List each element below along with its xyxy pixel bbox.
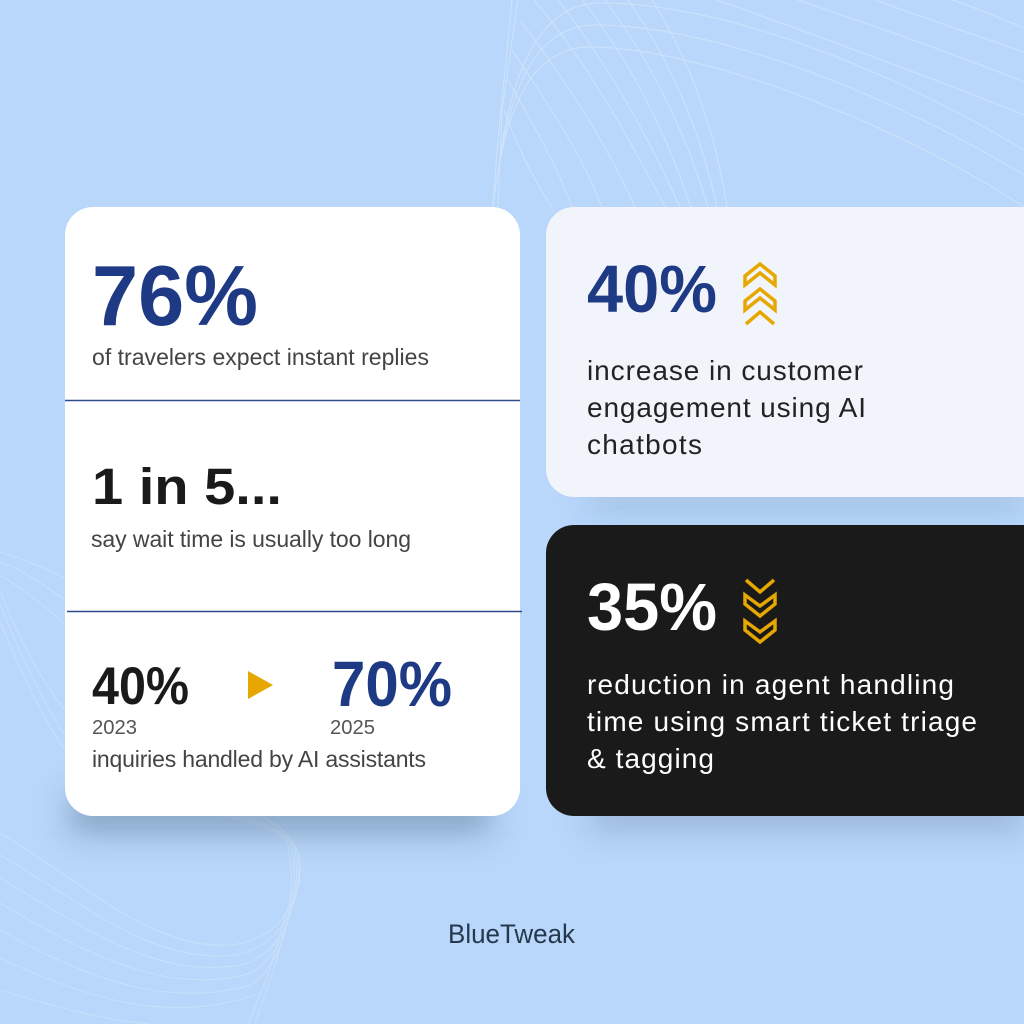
stat: 1 in 5: 1 in 5... [92,458,282,515]
icon: up chevrons [745,264,775,324]
panel: handling time card: reduction in agent handling [587,669,954,700]
panel: engagement card: chatbots [587,429,702,460]
panel: engagement card: 40% [587,252,717,327]
logo: BlueTweak: BlueTweak [448,919,575,949]
panel: handling time card: & tagging [587,743,714,774]
panel: handling time card [546,525,1024,816]
icon: down chevrons [745,580,775,642]
panel: engagement card: engagement using AI [587,392,866,423]
stat: 40 percent to 70 percent: 2025 [330,717,375,739]
stat: 1 in 5 [91,458,411,552]
panel: engagement card: increase in customer [587,355,863,386]
panel: engagement card [546,207,1024,497]
panel: left statistics card [65,207,522,816]
stat: 40 percent to 70 percent: 40% [92,657,189,716]
background pattern: top right curves [493,0,1024,207]
stat: 76 percent: of travelers expect instant replies [92,344,429,370]
stat: 40 percent to 70 percent [92,648,452,772]
stat: 40 percent to 70 percent: 70% [332,648,452,720]
card shadows [70,482,1024,832]
stat: 40 percent to 70 percent: 2023 [92,717,137,739]
stat: 40 percent to 70 percent: inquiries handled by AI assistants [92,746,426,772]
panel: handling time card: time using smart ticket triage [587,706,977,737]
stat: 76 percent [92,249,429,370]
background pattern: lower left curves [0,552,300,1024]
icon: arrow [248,671,273,699]
stat: 76 percent: 76% [92,249,258,344]
panel: handling time card: 35% [587,570,717,645]
stat: 1 in 5: say wait time is usually too long [91,526,411,552]
